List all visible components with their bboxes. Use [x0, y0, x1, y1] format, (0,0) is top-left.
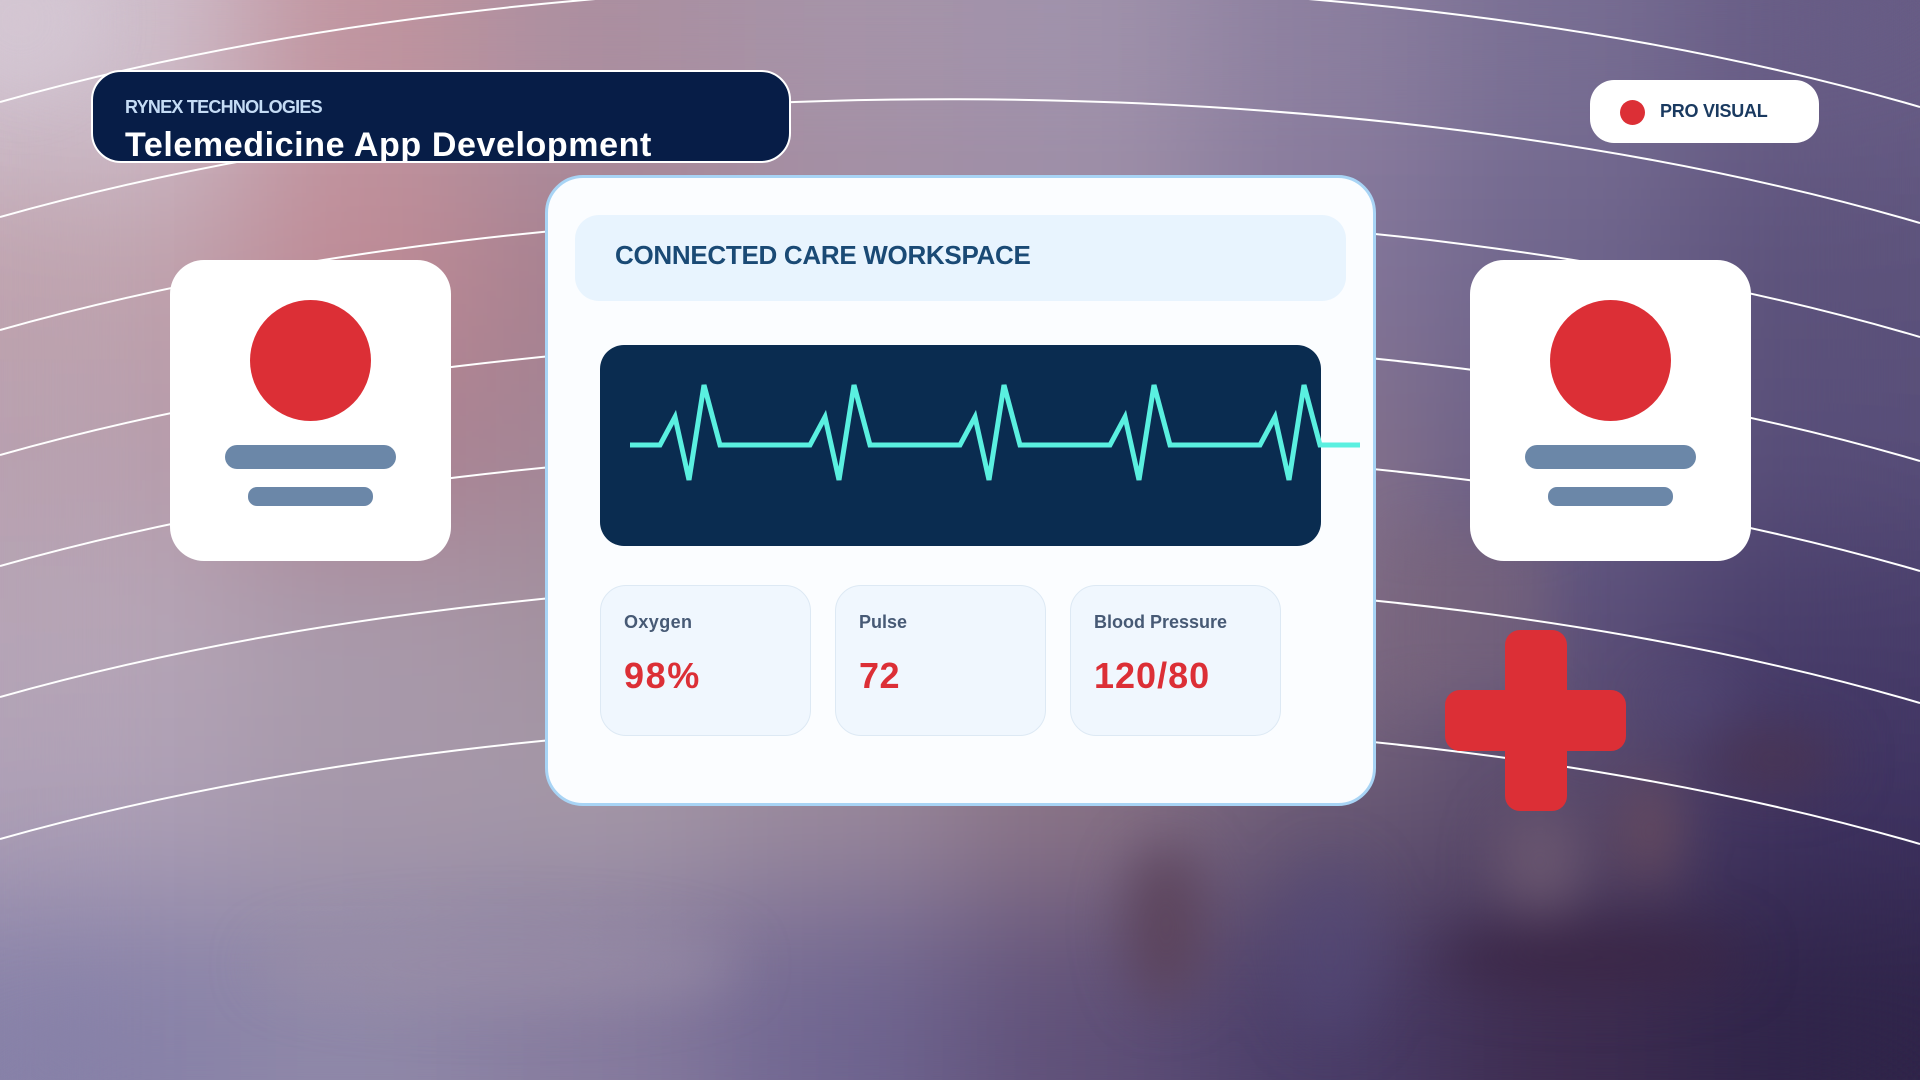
role bar: [1548, 487, 1673, 506]
metric: blood pressure: [1070, 585, 1281, 736]
pro visual badge: [1590, 80, 1819, 143]
title banner: [91, 70, 791, 163]
avatar head: [250, 300, 371, 421]
badge label: PRO VISUAL: [1660, 101, 1768, 121]
metric: oxygen: [600, 585, 811, 736]
metric: pulse: [835, 585, 1046, 736]
main title: Telemedicine App Development: [125, 126, 652, 164]
ECG waveform: [630, 384, 1360, 480]
oxygen value: 98%: [624, 655, 701, 696]
blood pressure label: Blood Pressure: [1094, 612, 1227, 632]
avatar head: [1550, 300, 1671, 421]
blood pressure value: 120/80: [1094, 655, 1210, 696]
panel: connected care workspace: [545, 175, 1376, 806]
workspace heading: CONNECTED CARE WORKSPACE: [615, 240, 1031, 270]
name bar: [1525, 445, 1696, 469]
pulse label: Pulse: [859, 612, 907, 632]
left participant card: [170, 260, 451, 561]
medical cross icon: [1445, 630, 1626, 811]
oxygen label: Oxygen: [624, 612, 692, 632]
workspace header: [575, 215, 1346, 301]
badge dot: [1620, 100, 1645, 125]
pulse value: 72: [859, 655, 900, 696]
role bar: [248, 487, 373, 506]
company name: RYNEX TECHNOLOGIES: [125, 97, 322, 117]
heart monitor: [600, 345, 1321, 546]
name bar: [225, 445, 396, 469]
right participant card: [1470, 260, 1751, 561]
